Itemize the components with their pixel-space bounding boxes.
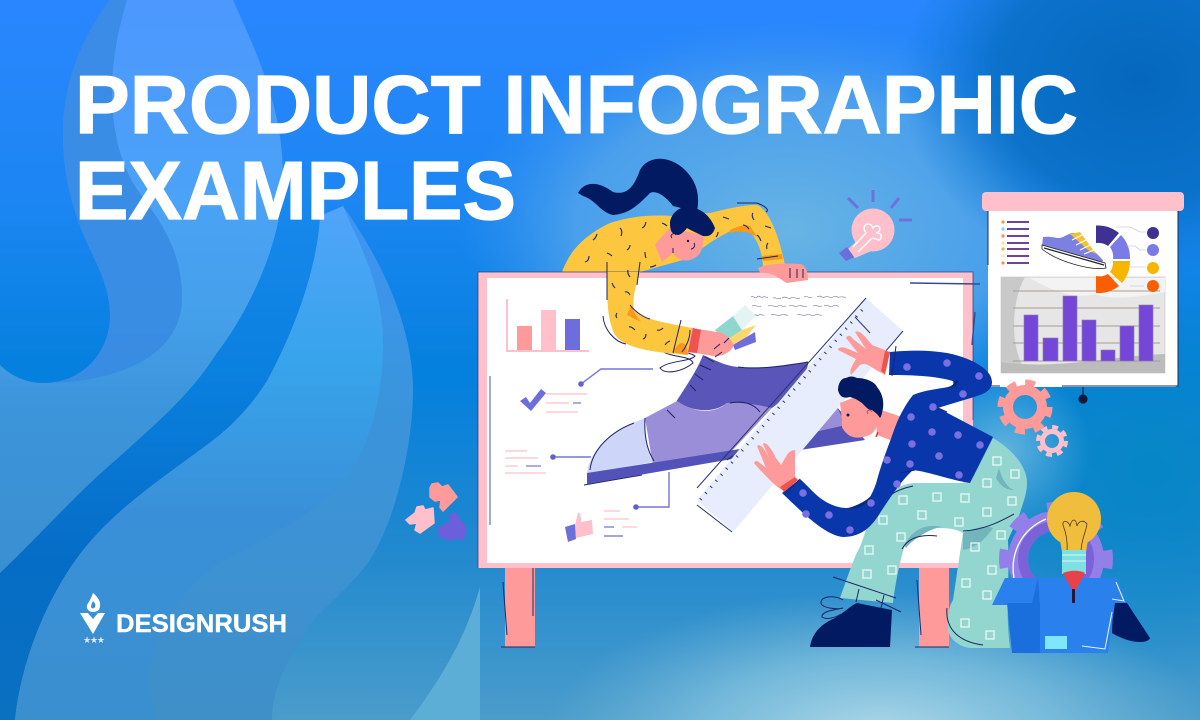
man: back shoe and box [992, 578, 1150, 653]
presentation screen [982, 192, 1184, 404]
icon: light bulb [839, 190, 912, 261]
big shoe [584, 351, 865, 485]
screen: bar chart panel [1001, 277, 1165, 373]
board legs [501, 568, 949, 647]
screen: donut chart [1096, 225, 1159, 293]
woman: head [655, 207, 715, 262]
checkmark note [520, 369, 653, 412]
man: hands on ruler [754, 331, 890, 492]
whiteboard [478, 272, 980, 568]
title: PRODUCT INFOGRAPHIC [75, 58, 1078, 151]
ruler [697, 298, 903, 532]
thumbs-up note [565, 472, 669, 542]
icon: purple gear [1006, 509, 1106, 609]
icon: puzzle pieces [406, 483, 466, 540]
icon: yellow bulb [1047, 492, 1101, 603]
woman: front arm and hands [585, 203, 808, 357]
man: trouser and leg [833, 438, 1027, 648]
screen: text list [1001, 220, 1029, 265]
logo: DesignRush [80, 593, 287, 645]
man: front shoe [810, 597, 892, 647]
logo: DesignRush: DESIGNRUSH [116, 610, 287, 638]
title: EXAMPLES [75, 144, 516, 237]
colour swatches [715, 305, 756, 350]
icon: gears [1000, 382, 1066, 455]
mini bar chart on board [507, 299, 589, 351]
screen: sneaker [1042, 232, 1106, 269]
middle note [505, 451, 591, 473]
logo: DesignRush: ★★★ [83, 635, 105, 645]
handwriting scribble [751, 296, 846, 316]
man: sweater [782, 346, 993, 537]
title [75, 58, 1078, 237]
woman: ponytail and torso behind board [562, 159, 785, 272]
man: head [838, 376, 905, 440]
background waves [0, 0, 480, 720]
